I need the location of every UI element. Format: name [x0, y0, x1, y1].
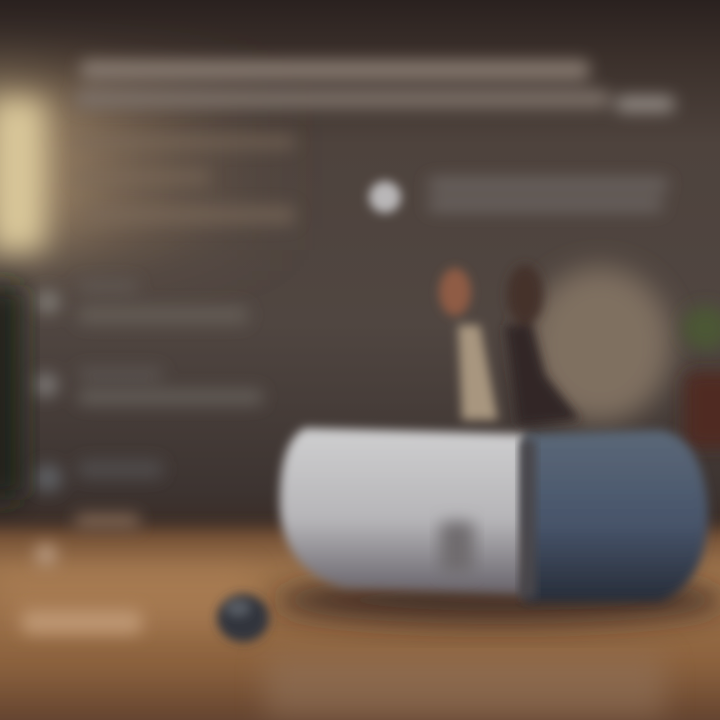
heading block (blurred text) [75, 60, 675, 112]
window glow on the left [0, 80, 290, 250]
humidifier device [280, 428, 708, 602]
centre seam [520, 440, 536, 598]
pair of raised legs [439, 265, 580, 425]
blue body [525, 430, 708, 602]
icon: white round marker [369, 181, 401, 213]
dark leg [505, 265, 580, 425]
list item 3 [34, 460, 163, 492]
small dark ball [217, 594, 269, 642]
device emblem [440, 522, 474, 574]
wooden floor [0, 528, 720, 720]
beige round wall disc [528, 267, 672, 423]
left plant [0, 285, 20, 500]
humidifier shadow [275, 576, 720, 624]
callout text (blurred text) [428, 178, 668, 211]
list item 2 [34, 368, 263, 405]
right plant and pot [682, 306, 720, 448]
white body [280, 428, 525, 594]
light leg [439, 268, 498, 420]
intro text block (blurred text) [75, 135, 295, 225]
list item 1 [36, 280, 248, 324]
list item 4 on floor [22, 514, 142, 634]
